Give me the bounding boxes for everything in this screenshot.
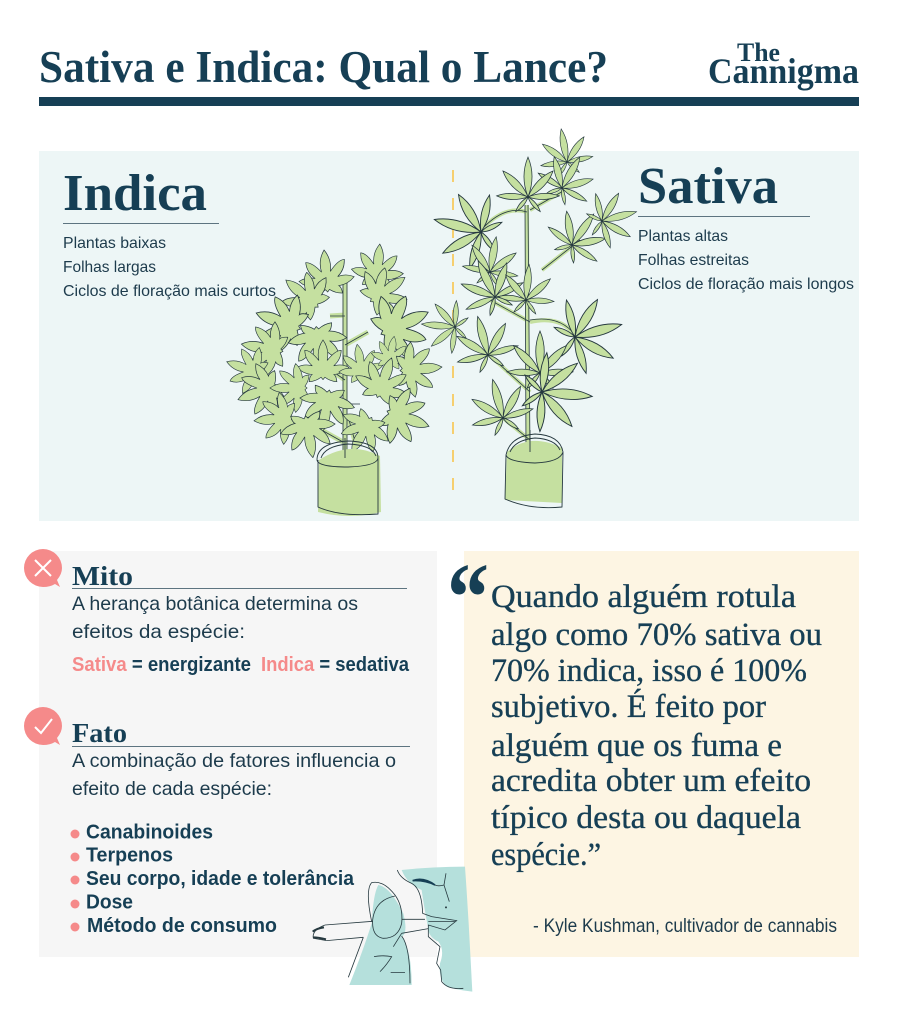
text: quote: algo como 70% sativa ou: [491, 617, 822, 653]
text: Sativa traits: [638, 228, 854, 293]
text: quote: [491, 579, 822, 873]
list: factors: Método de consumo: [87, 914, 277, 937]
panel: plant comparison: [39, 151, 859, 521]
text: myth statement: efeitos da espécie:: [72, 621, 245, 643]
text: quote: espécie.”: [491, 837, 601, 873]
text: quote: alguém que os fuma e: [491, 728, 782, 764]
divider: dashed centre line: [452, 170, 454, 502]
text: fact statement: [72, 750, 396, 800]
text: Indica traits: [63, 235, 276, 300]
text: Indica traits: Plantas baixas: [63, 235, 166, 252]
heading: Indica: Indica: [63, 165, 207, 222]
illustration: hand and face smoking: [313, 867, 472, 992]
list: factors: [70, 820, 355, 937]
text: sativa and indica effects: Sativa = energizante: [72, 653, 251, 676]
text: quote: subjetivo. É feito por: [491, 688, 766, 725]
heading: Mito: Mito: [72, 561, 133, 591]
list: factors: Seu corpo, idade e tolerância: [86, 867, 355, 890]
list: factors: Dose: [86, 890, 133, 914]
icon: myth cross bubble: [24, 549, 62, 587]
list: factors: Canabinoides: [86, 820, 213, 844]
text: Indica traits: Folhas largas: [63, 259, 156, 276]
heading: Fato: Fato: [72, 718, 127, 748]
heading: Sativa: Sativa: [638, 158, 778, 215]
title: Sativa e Indica: Qual o Lance?: [39, 42, 608, 92]
list: factors: Terpenos: [86, 844, 173, 866]
logo: The Cannigma: The: [737, 38, 780, 67]
text: fact statement: A combinação de fatores influencia o: [72, 750, 396, 772]
text: fact statement: efeito de cada espécie:: [72, 778, 272, 800]
illustration: indica plant: [218, 242, 444, 516]
illustration: sativa plant: [419, 124, 644, 508]
text: Sativa traits: Ciclos de floração mais longos: [638, 276, 854, 293]
panel: myth and fact: [39, 551, 437, 957]
text: sativa and indica effects: Indica = sedativa: [261, 653, 410, 676]
panel: quote: [464, 551, 859, 957]
header rule: [39, 97, 859, 106]
text: Sativa traits: Folhas estreitas: [638, 252, 749, 269]
text: myth statement: [72, 593, 358, 643]
text: attribution: - Kyle Kushman, cultivador de cannabis: [533, 915, 837, 937]
text: myth statement: A herança botânica determina os: [72, 593, 358, 615]
text: sativa and indica effects: [72, 653, 410, 676]
icon: quotation mark: “: [447, 544, 489, 652]
icon: fact check bubble: [24, 707, 62, 745]
text: quote: 70% indica, isso é 100%: [491, 653, 807, 689]
text: Indica traits: Ciclos de floração mais curtos: [63, 283, 276, 300]
text: quote: típico desta ou daquela: [491, 800, 801, 836]
logo: The Cannigma: Cannigma: [708, 51, 859, 91]
text: quote: acredita obter um efeito: [491, 763, 811, 799]
text: quote: Quando alguém rotula: [491, 579, 796, 615]
text: Sativa traits: Plantas altas: [638, 228, 728, 245]
